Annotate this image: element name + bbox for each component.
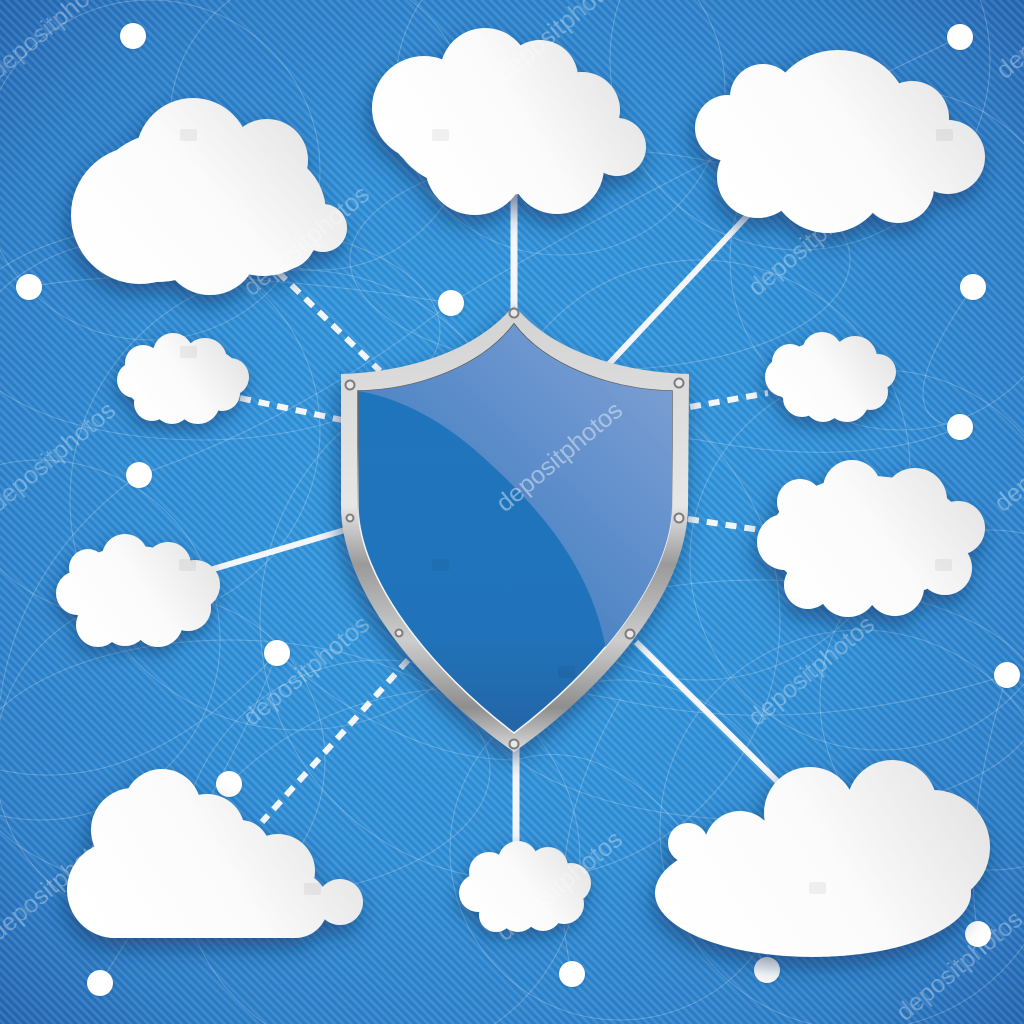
watermark: depositphotos — [238, 180, 375, 302]
watermark: depositphotos — [491, 825, 628, 947]
watermark: depositphotos — [238, 610, 375, 732]
watermark camera marks — [179, 129, 953, 895]
shield — [341, 305, 700, 752]
connector lines — [210, 190, 778, 850]
cloud: small left — [117, 333, 249, 424]
cloud: top middle — [372, 28, 646, 215]
cloud: top left — [71, 98, 347, 295]
cloud: left middle — [56, 534, 220, 647]
cloud: bottom left — [67, 769, 363, 938]
cloud: bottom right — [655, 760, 990, 957]
cloud: top right — [695, 50, 985, 233]
watermark: depositphotos — [743, 610, 880, 732]
cloud: right middle — [757, 460, 985, 617]
shield metal frame — [341, 305, 689, 752]
cloud: bottom middle small — [459, 841, 591, 932]
shield gloss highlight — [358, 324, 672, 647]
watermark: depositphotos — [743, 180, 880, 302]
cloud: small right — [765, 332, 896, 422]
shield blue face — [358, 324, 672, 733]
watermark: depositphotos — [491, 396, 628, 518]
shield rivets — [346, 308, 684, 748]
